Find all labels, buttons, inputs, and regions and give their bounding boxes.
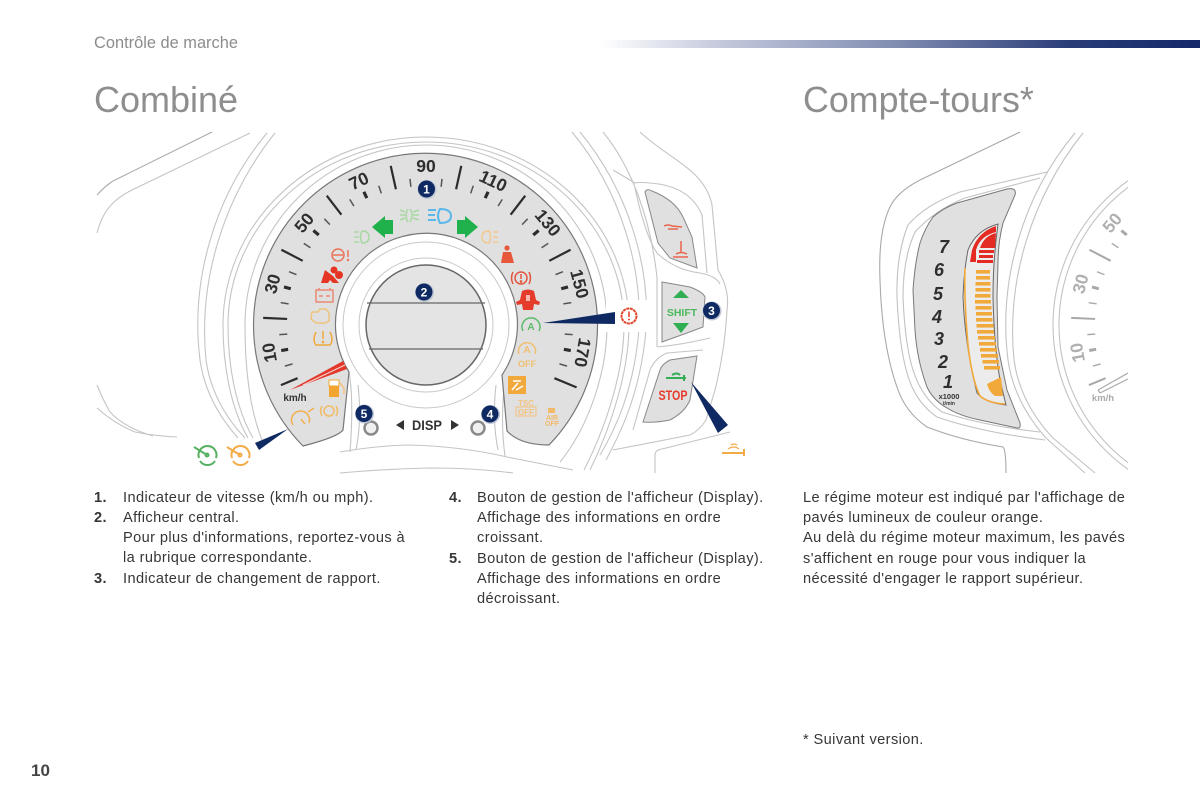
decrease button [364, 422, 378, 434]
icon: tyre pressure [314, 331, 332, 345]
callout: stop and start pointer [691, 382, 728, 433]
item 4 text: croissant. [477, 530, 543, 546]
legend list middle [449, 490, 764, 607]
icon: auto stop start off: OFF [518, 359, 536, 369]
speed scale numbers: 50 [290, 209, 318, 237]
icon: power steering warning [332, 249, 348, 261]
icon: TSC OFF [516, 399, 536, 417]
callout pointer: speed limiter [255, 429, 288, 450]
icon: auto stop start off [518, 343, 536, 369]
tachometer description: s'affichent en rouge pour vous indiquer la [803, 551, 1086, 567]
rpm numbers [931, 237, 953, 392]
item 5 text: décroissant. [477, 591, 560, 607]
icon: auto stop start off: A [523, 345, 531, 356]
DISP control [396, 420, 459, 430]
ghost speed numbers: 30 [1068, 272, 1093, 296]
rpm numbers: 7 [939, 237, 950, 257]
footnote: * Suivant version. [803, 732, 924, 748]
icon: door open [516, 290, 540, 310]
speed scale numbers: 110 [476, 166, 510, 196]
item 2 text [123, 510, 405, 566]
ghost speed numbers [1066, 209, 1126, 364]
item 3 text: Indicateur de changement de rapport. [123, 571, 381, 587]
badge 4: 4 [487, 408, 494, 422]
speed scale ticks [263, 166, 577, 387]
central display [343, 242, 509, 408]
needle [290, 361, 347, 390]
badge 3: 3 [708, 304, 715, 318]
badge 2: 2 [421, 286, 428, 300]
speed scale numbers: 30 [260, 272, 285, 296]
item 4 text: Bouton de gestion de l'afficheur (Display). [477, 490, 764, 506]
ghost km/h unit: km/h [1092, 393, 1114, 404]
icon: airbag [321, 266, 343, 283]
km/h unit: km/h [283, 393, 307, 404]
item 5 text: Bouton de gestion de l'afficheur (Display). [477, 551, 764, 567]
icon: speed limiter orange [227, 446, 250, 465]
item 3 number: 3. [94, 571, 107, 587]
icon: TSC OFF: OFF [518, 408, 534, 417]
rpm bar frame [963, 224, 1006, 405]
badge 4 [481, 405, 500, 424]
tachometer description [803, 490, 1125, 587]
speed scale numbers: 170 [570, 336, 595, 369]
rpm numbers: 3 [934, 329, 944, 349]
instrument illustrations [96, 132, 1128, 474]
item 5 text: Affichage des informations en ordre [477, 571, 721, 587]
tachometer description: nécessité d'engager le rapport supérieur. [803, 571, 1083, 587]
title: Compte-tours: Compte-tours* [803, 80, 1034, 120]
tachometer description: Au delà du régime moteur maximum, les pavés [803, 530, 1125, 546]
badge 1 [418, 180, 436, 199]
icon: parking brake [512, 272, 530, 284]
icon: seat belt [501, 245, 514, 263]
speedometer cluster [97, 132, 745, 473]
item 2 number: 2. [94, 510, 107, 526]
ghost speed numbers: 50 [1098, 209, 1126, 237]
icon: engine [311, 309, 329, 323]
callout: service warning [543, 300, 648, 332]
rpm unit [939, 392, 959, 407]
section header: Contrôle de marche [94, 34, 238, 52]
item 1 number: 1. [94, 490, 107, 506]
icon: air bag off: AIR [546, 415, 558, 422]
icon: stop and start orange [722, 444, 745, 456]
icon: auto stop start green [522, 318, 540, 333]
panel: gear shift indicator [662, 282, 705, 342]
speed scale numbers: 10 [258, 341, 281, 364]
rpm numbers: 1 [943, 372, 953, 392]
speed scale numbers [258, 156, 595, 369]
tachometer description: Le régime moteur est indiqué par l'affichage de [803, 490, 1125, 506]
icon: high beam [428, 209, 451, 223]
DISP control: DISP [412, 417, 442, 433]
icon: direction arrows [372, 216, 478, 238]
icon: stability control [508, 376, 526, 394]
legend list left [94, 490, 405, 587]
speed scale numbers: 150 [566, 267, 593, 301]
panel: tachometer scale [913, 189, 1020, 428]
panel: oil and temperature warnings [645, 190, 697, 268]
tachometer description: pavés lumineux de couleur orange. [803, 510, 1043, 526]
icon: TSC OFF: TSC [518, 399, 534, 408]
item 2 text: la rubrique correspondante. [123, 550, 312, 566]
item 4 text: Affichage des informations en ordre [477, 510, 721, 526]
item 5 text [477, 551, 764, 607]
orange rpm blocks [975, 270, 1003, 396]
badge 1: 1 [423, 182, 430, 196]
badge 5 [355, 404, 374, 424]
badge 3 [702, 302, 722, 320]
badge 2 [415, 283, 434, 302]
icon: fuel [329, 380, 344, 397]
item 2 text: Afficheur central. [123, 510, 239, 526]
rpm unit: t/min [943, 401, 955, 407]
tachometer cluster [880, 132, 1200, 503]
item 2 text: Pour plus d'informations, reportez-vous à [123, 530, 405, 546]
panel: speedometer dial [254, 153, 598, 446]
icon: air bag off [545, 408, 559, 426]
icon: rear fog lamp [482, 231, 498, 243]
icon: air bag off: OFF [545, 421, 560, 428]
panel: gear shift indicator: SHIFT [667, 307, 698, 319]
item 5 number: 5. [449, 551, 462, 567]
increase button [472, 422, 484, 434]
item 4 number: 4. [449, 490, 462, 506]
speed scale numbers: 130 [531, 205, 565, 241]
ghost needle [1098, 373, 1128, 393]
panel: stop and start: STOP [658, 388, 688, 403]
badge 5: 5 [361, 407, 368, 421]
title: Combiné: Combiné [94, 79, 238, 120]
rpm numbers: 6 [934, 260, 945, 280]
rpm unit: x1000 [939, 392, 959, 401]
icon: auto stop start green: A [527, 322, 535, 333]
page number: 10 [31, 761, 50, 780]
red rpm blocks [977, 233, 996, 263]
ghost speed ticks [1071, 231, 1127, 385]
speed scale numbers: 70 [346, 168, 372, 194]
item 1 text: Indicateur de vitesse (km/h ou mph). [123, 490, 373, 506]
ghost speed numbers: 10 [1066, 341, 1089, 364]
rpm numbers: 4 [931, 307, 942, 327]
header gradient bar [600, 40, 1200, 48]
item 4 text [477, 490, 764, 546]
icon: cruise control green [194, 446, 217, 465]
icon: speed limiter in dial [292, 408, 314, 425]
rpm numbers: 5 [933, 284, 944, 304]
icon: front fog lamp [354, 231, 369, 243]
speed scale numbers: 90 [416, 156, 436, 176]
icon: maintenance [320, 406, 338, 416]
icon: battery [316, 288, 333, 302]
panel: stop and start [643, 356, 697, 422]
icon: low beam [400, 209, 419, 222]
rpm numbers: 2 [937, 352, 948, 372]
